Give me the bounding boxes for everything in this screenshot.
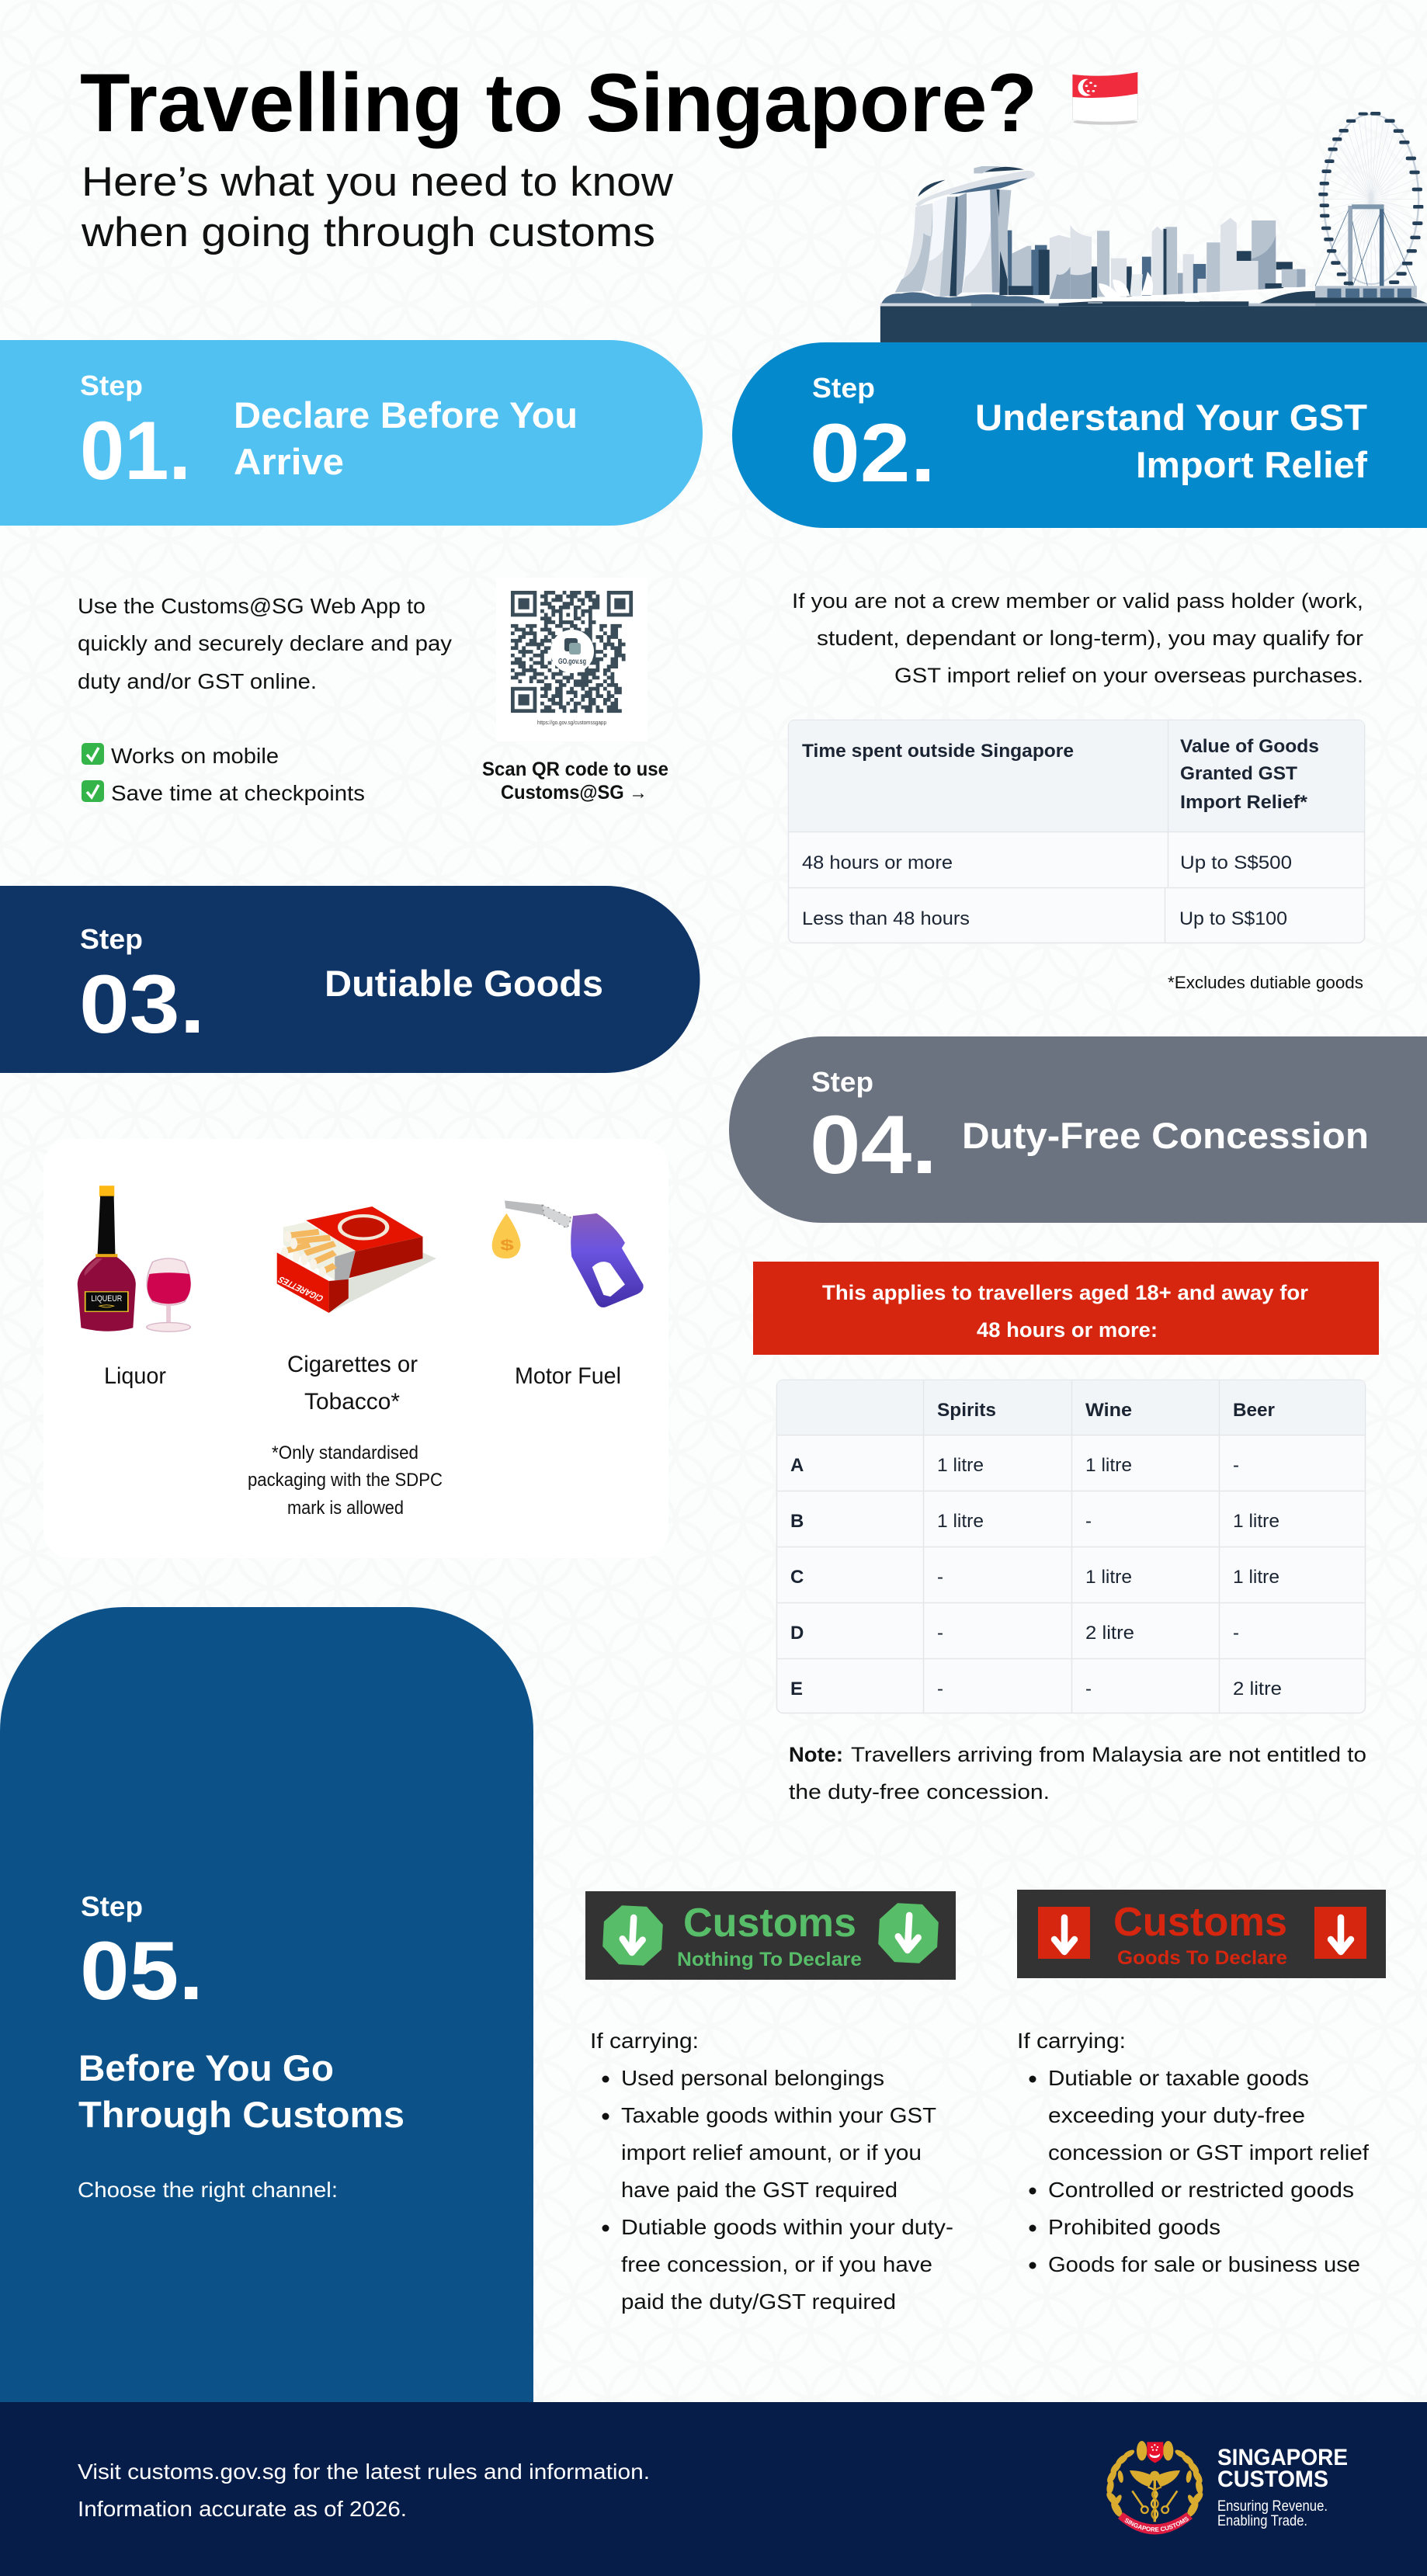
Singapore Flyer wheel [1315, 112, 1423, 297]
list: nothing to declare conditions: free concession, or if you have [621, 2252, 932, 2276]
table: duty-free concession: 1 litre [937, 1511, 984, 1532]
table: duty-free concession: - [1233, 1455, 1239, 1476]
panel: step 4 banner: 04. [810, 1098, 937, 1191]
table: duty-free concession: C [790, 1567, 804, 1588]
logo wordmark [1217, 2445, 1348, 2529]
panel: step 2 banner: Understand Your GST [975, 397, 1367, 438]
sign: goods to declare [1017, 1890, 1386, 1978]
table: duty-free concession: 2 litre [1233, 1679, 1282, 1699]
QR caption [482, 759, 668, 804]
panel: step 1 banner: 01. [80, 404, 191, 497]
table: duty-free concession: B [790, 1511, 804, 1532]
subtitle [81, 159, 674, 255]
note: Malaysia travellers [789, 1743, 1366, 1804]
list: goods to declare conditions: Prohibited goods [1048, 2215, 1220, 2239]
list: nothing to declare conditions: paid the duty/GST required [621, 2290, 896, 2314]
table: GST import relief: Up to S$100 [1179, 908, 1287, 929]
note: standardised packaging [248, 1442, 443, 1519]
panel: step 2 banner [732, 342, 1427, 528]
panel: step 5: Choose the right channel: [78, 2178, 338, 2202]
sign: nothing to declare: Nothing To Declare [677, 1949, 862, 1970]
panel: step 5 [0, 1607, 533, 2402]
list: goods to declare conditions: Goods for sale or business use [1048, 2252, 1360, 2276]
table: duty-free concession: 1 litre [1233, 1567, 1279, 1588]
footer [0, 2402, 1427, 2576]
table: duty-free concession: 1 litre [937, 1455, 984, 1476]
list: nothing to declare conditions: import relief amount, or if you [621, 2140, 922, 2165]
label: Cigarettes or Tobacco [287, 1352, 418, 1415]
text block: step 1 description: duty and/or GST online. [78, 669, 317, 693]
icon: green tick [82, 743, 104, 765]
table: duty-free concession: 1 litre [1233, 1511, 1279, 1532]
list: goods to declare conditions: Dutiable or taxable goods [1048, 2066, 1309, 2090]
table: duty-free concession: A [790, 1455, 804, 1476]
logo wordmark: Ensuring Revenue. [1217, 2498, 1328, 2515]
list: goods to declare conditions: exceeding your duty-free [1048, 2103, 1305, 2127]
skyline illustration [880, 112, 1427, 342]
checklist: Save time at checkpoints [111, 781, 365, 805]
table: GST import relief: Less than 48 hours [802, 908, 970, 929]
panel: step 1 banner [0, 340, 703, 526]
icon: red arrow square left [1038, 1907, 1090, 1959]
callout: eligibility bar: 48 hours or more: [977, 1318, 1158, 1342]
table: duty-free concession [776, 1380, 1365, 1713]
icon: green octagon arrow left [602, 1904, 664, 1967]
icon: Singapore flag [1072, 72, 1137, 125]
table: duty-free concession: E [790, 1679, 803, 1699]
table: duty-free concession: 1 litre [1085, 1455, 1132, 1476]
table: GST import relief: Time spent outside Singapore [802, 741, 1074, 762]
table: GST import relief: Up to S$500 [1180, 852, 1292, 873]
list: nothing to declare conditions: Taxable goods within your GST [621, 2103, 936, 2127]
table: duty-free concession: 1 litre [1085, 1567, 1132, 1588]
sign: goods to declare: Goods To Declare [1117, 1947, 1287, 1969]
logo wordmark: Enabling Trade. [1217, 2513, 1307, 2529]
icon: green tick 2 [82, 780, 104, 802]
callout: eligibility bar [753, 1262, 1379, 1355]
text block: GST relief intro: If you are not a crew member or valid pass holder (work, [792, 589, 1363, 613]
text block: GST relief intro [792, 589, 1363, 687]
icon: fuel nozzle [492, 1200, 644, 1307]
checklist [82, 743, 365, 805]
panel: step 1 banner: Declare Before You [234, 394, 578, 436]
table: duty-free concession: Spirits [937, 1400, 996, 1421]
note: standardised packaging: *Only standardised [272, 1442, 418, 1463]
list: nothing to declare conditions: Used personal belongings [621, 2066, 884, 2090]
subtitle: when going through customs [81, 210, 655, 255]
subtitle: Here’s what you need to know [82, 159, 674, 205]
panel: step 3 banner: Dutiable Goods [325, 963, 603, 1004]
label: Cigarettes or Tobacco: Cigarettes or [287, 1352, 418, 1377]
table: duty-free concession: Beer [1233, 1400, 1275, 1421]
table: GST import relief: Granted GST [1180, 763, 1297, 784]
panel: step 4 banner [729, 1036, 1427, 1223]
text block: step 1 description: quickly and securely declare and pay [78, 631, 452, 655]
table: duty-free concession: - [1085, 1679, 1092, 1699]
note: Malaysia travellers: the duty-free concession. [789, 1780, 1050, 1804]
footer text: Visit customs.gov.sg for the latest rules and information. [78, 2460, 650, 2484]
icon: fuel nozzle: $ [500, 1236, 514, 1253]
panel: step 2 banner: Step [812, 372, 875, 404]
QR caption: Scan QR code to use [482, 759, 668, 780]
table: GST import relief [789, 720, 1365, 943]
logo: Singapore Customs crest: SINGAPORE CUSTOMS [1124, 2517, 1189, 2532]
sign: nothing to declare: Customs [683, 1901, 856, 1946]
panel: step 3 banner: Step [80, 923, 143, 955]
Marina Bay Sands [895, 166, 1035, 297]
list: goods to declare conditions [1017, 2029, 1369, 2276]
note: Malaysia travellers: Travellers arriving from Malaysia are not entitled to [851, 1743, 1366, 1766]
table: duty-free concession: - [937, 1623, 943, 1644]
panel: step 3 banner [0, 886, 700, 1073]
panel: step 1 banner: Step [80, 370, 143, 401]
table: GST import relief: Value of Goods [1180, 736, 1319, 757]
label: Liquor: Liquor [104, 1363, 166, 1389]
ground base [880, 306, 1427, 342]
table: GST import relief: 48 hours or more [802, 852, 953, 873]
text block: step 1 description: Use the Customs@SG Web App to [78, 594, 425, 618]
panel: step 5: 05. [80, 1924, 203, 2017]
icon: liquor bottle and wine glass [78, 1186, 191, 1331]
callout: eligibility bar: This applies to travellers aged 18+ and away for [822, 1281, 1309, 1304]
table: duty-free concession: - [1233, 1623, 1239, 1644]
panel: step 4 banner: Step [811, 1066, 873, 1098]
list: goods to declare conditions: concession or GST import relief [1048, 2140, 1369, 2165]
text block: GST relief intro: student, dependant or long-term), you may qualify for [817, 627, 1363, 650]
trees and ground strip [880, 290, 1427, 306]
table: duty-free concession: 2 litre [1085, 1623, 1134, 1644]
icon: cigarette pack [276, 1206, 436, 1313]
icon: green octagon arrow right [877, 1902, 939, 1964]
sign: goods to declare: Customs [1113, 1900, 1287, 1945]
note: standardised packaging: packaging with the SDPC [248, 1470, 443, 1491]
table: duty-free concession: - [937, 1567, 943, 1588]
panel: step 2 banner: 02. [810, 406, 936, 499]
panel: dutiable goods card [43, 1139, 668, 1558]
QR code: https://go.gov.sg/customssgapp [537, 719, 606, 726]
table: GST import relief: Import Relief* [1180, 792, 1308, 813]
logo: Singapore Customs crest [1106, 2441, 1203, 2534]
footer text [78, 2460, 650, 2521]
label: Motor Fuel: Motor Fuel [515, 1363, 621, 1389]
panel: step 5: Before You Go [78, 2047, 334, 2088]
note: Malaysia travellers: Note: [789, 1743, 843, 1766]
title: Travelling to Singapore? [80, 56, 1037, 149]
panel: step 1 banner: Arrive [234, 441, 344, 482]
list: goods to declare conditions: If carrying: [1017, 2029, 1126, 2053]
icon: cigarette pack: CIGARETTES [276, 1275, 326, 1304]
QR caption: Customs@SG → [501, 782, 648, 804]
panel: step 5: Step [81, 1890, 143, 1922]
table: duty-free concession: - [1085, 1511, 1092, 1532]
QR code [496, 578, 648, 741]
panel: step 2 banner: Import Relief [1136, 444, 1367, 485]
table: duty-free concession: D [790, 1623, 804, 1644]
icon: liquor bottle and wine glass: LIQUEUR [91, 1293, 122, 1303]
panel: step 5: Through Customs [78, 2094, 404, 2135]
list: nothing to declare conditions: If carrying: [590, 2029, 699, 2053]
sign: nothing to declare [585, 1891, 956, 1980]
logo wordmark: SINGAPORE [1217, 2445, 1348, 2470]
checklist: Works on mobile [111, 744, 279, 768]
list: nothing to declare conditions: Dutiable goods within your duty- [621, 2215, 953, 2239]
QR code: GO.gov.sg [558, 658, 586, 666]
footer text: Information accurate as of 2026. [78, 2497, 407, 2521]
note: standardised packaging: mark is allowed [287, 1498, 404, 1519]
table: duty-free concession: - [937, 1679, 943, 1699]
footnote: excludes dutiable goods: *Excludes dutiable goods [1168, 973, 1363, 992]
label: Cigarettes or Tobacco: Tobacco* [304, 1389, 400, 1415]
table: duty-free concession: Wine [1085, 1400, 1132, 1421]
panel: step 4 banner: Duty-Free Concession [962, 1115, 1369, 1156]
text block: step 1 description [78, 594, 452, 693]
ArtScience Museum and Helix Bridge [1044, 272, 1315, 304]
city buildings [1008, 218, 1305, 299]
icon: red arrow square right [1314, 1907, 1366, 1959]
logo wordmark: CUSTOMS [1217, 2467, 1328, 2492]
list: goods to declare conditions: Controlled or restricted goods [1048, 2178, 1354, 2202]
list: nothing to declare conditions [590, 2029, 953, 2314]
panel: step 3 banner: 03. [79, 957, 205, 1050]
list: nothing to declare conditions: have paid the GST required [621, 2178, 898, 2202]
text block: GST relief intro: GST import relief on your overseas purchases. [894, 664, 1363, 687]
